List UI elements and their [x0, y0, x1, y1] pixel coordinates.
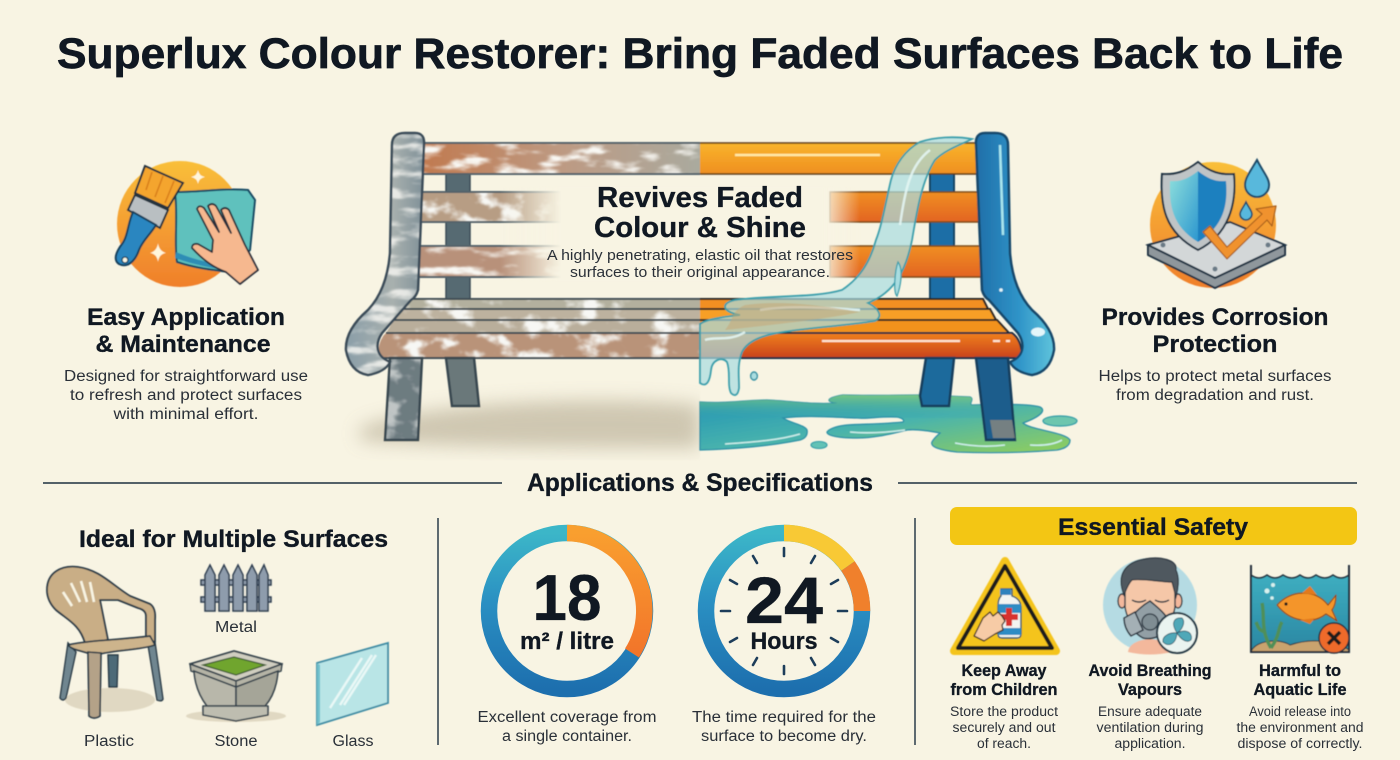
gauge: 24 hours dry time: [706, 533, 862, 689]
puddle of restorer: [700, 395, 1077, 453]
text: harmful to aquatic life: Aquatic Life: [1254, 680, 1346, 699]
safety banner: [950, 507, 1357, 545]
faded bench half: [346, 133, 710, 440]
restored bench half: [690, 133, 1054, 440]
weathered seat slats: [404, 299, 710, 309]
title: Superlux Colour Restorer: Bring Faded Surfaces Back to Life: [57, 30, 1343, 78]
text: keep away from children: Keep Away: [962, 661, 1047, 680]
text: corrosion protection: Provides Corrosion: [1102, 304, 1328, 331]
weathered back supports: [446, 170, 470, 302]
captions under gauges: a single container.: [502, 728, 632, 745]
icon: shield, metal plate and water drops: [1148, 160, 1285, 288]
icon: glass pane: [317, 643, 388, 725]
weathered legs: [385, 358, 422, 440]
flowing restorer oil: [700, 137, 972, 395]
panel: essential safety: [950, 507, 1364, 751]
captions under gauges: Excellent coverage from: [478, 709, 656, 726]
icon: stone planter: [186, 651, 286, 722]
text: keep away from children: from Children: [950, 680, 1058, 699]
text: corrosion protection: Protection: [1152, 331, 1278, 358]
icon: aquarium with fish and cross: [1251, 565, 1349, 653]
text: easy application: Designed for straightforward use: [64, 368, 308, 385]
icon: warning triangle: [954, 561, 1056, 651]
text: avoid breathing vapours: Ensure adequate: [1098, 704, 1202, 719]
text: avoid breathing vapours: application.: [1114, 736, 1186, 751]
gauge: 18 m² per litre coverage: m² / litre: [520, 628, 614, 655]
ground shadow under faded half: [360, 401, 700, 448]
text: keep away from children: securely and out: [952, 720, 1056, 735]
text: corrosion protection: Helps to protect metal surfaces: [1098, 368, 1332, 385]
text: corrosion protection: from degradation and rust.: [1116, 387, 1314, 404]
text: easy application: & Maintenance: [96, 331, 270, 358]
icon: paintbrush and cloth with hand: [116, 161, 258, 287]
labels: plastic, stone, glass: Glass: [332, 733, 374, 750]
text: avoid breathing vapours: Vapours: [1118, 680, 1182, 699]
central headline: Colour & Shine: [594, 212, 806, 244]
central headline: surfaces to their original appearance.: [570, 265, 830, 281]
gauge: 24 hours dry time: 24: [745, 563, 823, 637]
restored legs: [920, 358, 954, 406]
text: easy application: Easy Application: [87, 304, 285, 331]
section heading with rules: Applications & Specifications: [527, 469, 873, 497]
gauge: 18 m² per litre coverage: [489, 533, 645, 689]
text: avoid breathing vapours: ventilation during: [1096, 720, 1204, 735]
central headline: A highly penetrating, elastic oil that restores: [547, 248, 853, 264]
text: avoid breathing vapours: [1088, 661, 1212, 751]
text: easy application: with minimal effort.: [112, 406, 258, 423]
icon: metal fence: [201, 565, 271, 611]
central headline: [547, 182, 853, 281]
illustration: half-faded, half-restored bench: [346, 133, 1077, 453]
restored seat slats: [690, 299, 988, 309]
heading: surfaces: Ideal for Multiple Surfaces: [79, 526, 388, 553]
labels: plastic, stone, glass: Stone: [214, 733, 258, 750]
central headline: Revives Faded: [597, 182, 803, 214]
text: harmful to aquatic life: Avoid release into: [1249, 704, 1351, 719]
text: keep away from children: Store the product: [950, 704, 1058, 719]
restored side post: [976, 133, 1054, 375]
weathered back slats: [418, 143, 708, 174]
text: keep away from children: [950, 661, 1058, 751]
centre fade behind headline: [500, 187, 860, 281]
text: avoid breathing vapours: Avoid Breathing: [1088, 661, 1212, 680]
panel: surfaces: [47, 526, 388, 750]
gauge: 24 hours dry time: Hours: [750, 628, 818, 655]
clock ticks: [721, 548, 847, 674]
captions under gauges: [478, 709, 876, 745]
text: harmful to aquatic life: Harmful to: [1259, 661, 1341, 680]
text: easy application: [64, 304, 308, 423]
labels: plastic, stone, glass: Plastic: [84, 733, 134, 750]
weathered side post: [346, 133, 424, 375]
restored back slats: [690, 143, 982, 174]
gauge: 18 m² per litre coverage: 18: [532, 561, 602, 634]
text: easy application: to refresh and protect surfaces: [70, 387, 302, 404]
label: metal: Metal: [215, 619, 257, 636]
text: harmful to aquatic life: the environment and: [1236, 720, 1364, 735]
text: harmful to aquatic life: [1236, 661, 1364, 751]
safety banner: Essential Safety: [1058, 514, 1249, 541]
icon: person with respirator and fan: [1103, 558, 1197, 654]
text: corrosion protection: [1098, 304, 1332, 404]
captions under gauges: The time required for the: [692, 709, 876, 726]
icon: plastic chair: [47, 567, 163, 718]
text: harmful to aquatic life: dispose of correctly.: [1238, 736, 1362, 751]
text: keep away from children: of reach.: [977, 736, 1031, 751]
restored back supports: [930, 170, 954, 302]
captions under gauges: surface to become dry.: [701, 728, 867, 745]
labels: plastic, stone, glass: [84, 733, 374, 750]
